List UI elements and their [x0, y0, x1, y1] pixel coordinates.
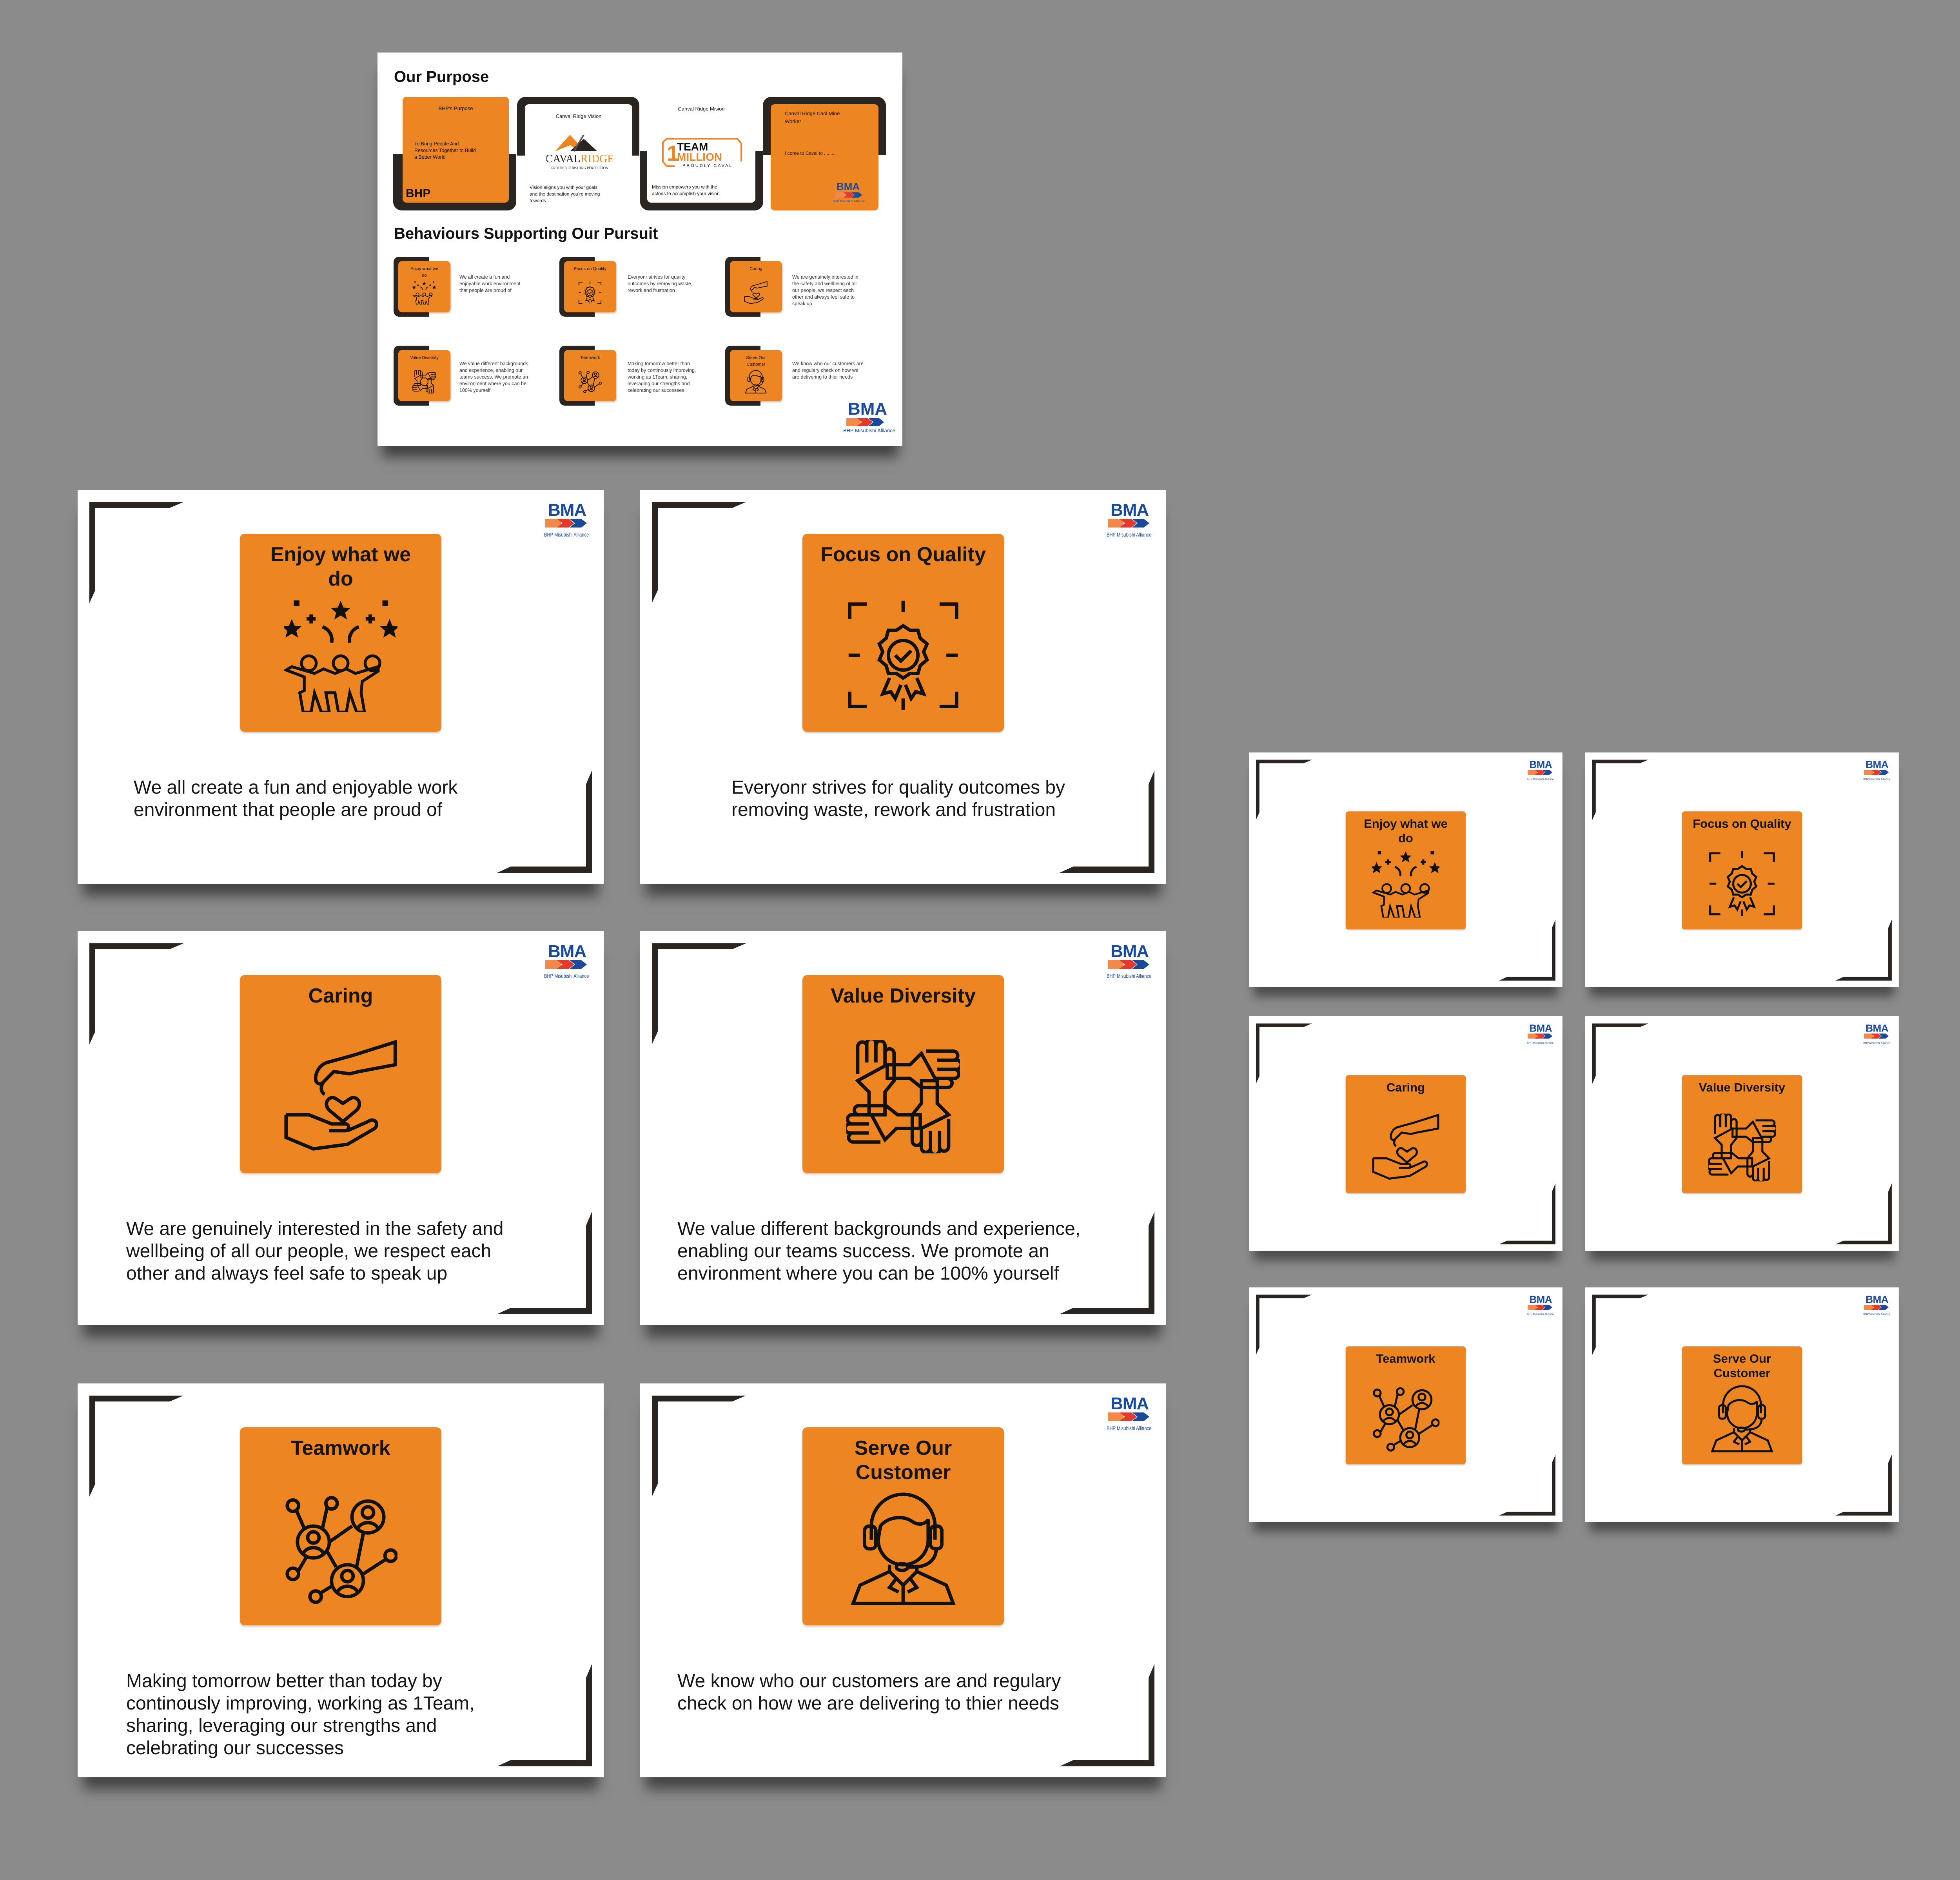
text: caring: other and always feel safe to [792, 294, 855, 300]
small card: Enjoy what we do [1249, 752, 1563, 987]
card: BHP's Purpose [403, 97, 509, 203]
item: Serve Our Customer [725, 346, 788, 406]
card: Teamwork: sharing, leveraging our strengths and [126, 1715, 437, 1736]
card: Value Diversity [640, 931, 1166, 1325]
item: Caring: Caring [750, 266, 762, 271]
text: caring: our people, we respect each [792, 288, 854, 293]
card: Canval Ridge Mission: Mission empowers you with the [652, 184, 717, 190]
small card: Caring: BHP Misubishi Alliance [1527, 1041, 1553, 1045]
small card: Enjoy what we do: BHP Misubishi Alliance [1527, 777, 1553, 781]
card: Enjoy what we do: We all create a fun and enjoyable work [134, 777, 457, 798]
text: quality: outcomes by removing waste, [628, 281, 692, 286]
card: BHP's Purpose: BHP’s Purpose [439, 105, 473, 111]
card: Serve Our Customer [640, 1383, 1166, 1777]
card: Serve Our Customer: BMA [1111, 1394, 1149, 1413]
small card: Serve Our Customer: Serve Our [1713, 1352, 1771, 1365]
small card: Enjoy what we do: Enjoy what we [1364, 817, 1448, 830]
item: Serve Our Customer: Serve Our [746, 355, 766, 360]
card: Caring: wellbeing of all our people, we respect each [126, 1241, 491, 1262]
card: Focus on Quality: removing waste, rework and frustration [731, 799, 1056, 820]
text: customer: are delivering to thier needs [792, 374, 853, 380]
card: Enjoy what we do: BHP Misubishi Alliance [544, 531, 589, 538]
logo: BMA: BMA [848, 399, 887, 419]
card: Caring: Caring [309, 984, 373, 1007]
card: Canval Ridge Vision: and the destination you’re moving [530, 191, 600, 197]
small card: Value Diversity: BHP Misubishi Alliance [1863, 1041, 1890, 1045]
card: Value Diversity: We value different backgrounds and experience, [677, 1218, 1080, 1239]
panel: overview sheet [377, 53, 902, 446]
card: Caring [78, 931, 604, 1325]
card: Serve Our Customer: BHP Misubishi Alliance [1107, 1425, 1151, 1431]
item: Value Diversity: Value Diversity [410, 355, 439, 360]
text: enjoy: that people are proud of [459, 288, 512, 293]
card: Enjoy what we do: Enjoy what we [270, 543, 411, 566]
card: Canval Ridge Coal Mine Worker [771, 104, 878, 210]
small card: Serve Our Customer: BHP Misubishi Alliance [1863, 1312, 1890, 1316]
card: Serve Our Customer: Customer [856, 1461, 951, 1484]
card: Focus on Quality: BHP Misubishi Alliance [1107, 531, 1151, 538]
card: Canval Ridge Coal Mine Worker: Canval Ridge Caol Mine [785, 111, 840, 116]
item: Teamwork: Teamwork [580, 355, 600, 360]
card: Canval Ridge Mission: TEAM [677, 141, 708, 153]
card: Teamwork: continously improving, working as 1Team, [126, 1693, 474, 1714]
card: Canval Ridge Coal Mine Worker: Worker [785, 118, 801, 124]
card: Focus on Quality: Focus on Quality [820, 543, 986, 566]
card: Enjoy what we do [78, 490, 604, 884]
card: Focus on Quality [640, 490, 1166, 884]
card: Canval Ridge Vision: CAVALRIDGE [546, 153, 613, 165]
card: Focus on Quality: Everyonr strives for quality outcomes by [731, 777, 1065, 798]
card: Value Diversity: enabling our teams success. We promote an [677, 1241, 1049, 1262]
text: diversity [459, 361, 528, 394]
card: Value Diversity: environment where you can be 100% yourself [677, 1263, 1059, 1284]
panel: purpose cards row [393, 96, 887, 211]
card: Canval Ridge Vision: PROUDLY PURSUING PERFECTION [551, 166, 608, 170]
text: caring: speak up [792, 301, 812, 306]
card: Enjoy what we do: do [328, 567, 353, 590]
card: Focus on Quality: BMA [1111, 500, 1149, 520]
small card: Value Diversity [1585, 1016, 1899, 1251]
small card: Caring: Caring [1387, 1081, 1425, 1094]
item: Enjoy what we do [394, 257, 456, 317]
text: teamwork: celebrating our successes [628, 388, 684, 393]
small card: Caring: BMA [1529, 1022, 1552, 1034]
item: Focus on Quality: Focus on Quality [574, 266, 606, 271]
card: Canval Ridge Mission [647, 97, 755, 203]
item: Focus on Quality [559, 257, 622, 317]
card: Teamwork: Making tomorrow better than today by [126, 1671, 442, 1691]
item: Value Diversity [394, 346, 456, 406]
small card: Value Diversity: BMA [1866, 1022, 1888, 1034]
text: enjoy: enjoyable work environment [459, 281, 521, 286]
text: teamwork: Making tomorrow better than [628, 361, 690, 366]
text: diversity: environment where you can be [459, 381, 526, 386]
card: Value Diversity: BHP Misubishi Alliance [1107, 973, 1151, 979]
card: Caring: BMA [548, 942, 586, 961]
card: Canval Ridge Vision: Vision aligns you with your goals [530, 185, 597, 190]
card: BHP's Purpose: BHP [406, 187, 430, 200]
small card: Caring [1249, 1016, 1563, 1251]
card: Serve Our Customer: We know who our customers are and regulary [677, 1671, 1061, 1691]
card: Canval Ridge Mission: 1 [667, 141, 679, 165]
small card: Teamwork [1249, 1287, 1563, 1522]
card: Enjoy what we do: BMA [548, 500, 586, 520]
card: Serve Our Customer: Serve Our [855, 1437, 952, 1459]
text: caring: We are genuinely interested in [792, 274, 858, 280]
card: Caring: We are genuinely interested in the safety and [126, 1218, 503, 1239]
text: diversity: We value different backgrounds [459, 361, 528, 366]
text: enjoy: We all create a fun and [459, 274, 510, 280]
text: customer: We know who our customers are [792, 361, 864, 366]
logo: BMA: BHP Misubishi Alliance [843, 428, 895, 433]
card: Caring: other and always feel safe to speak up [126, 1263, 447, 1284]
text: diversity: and experience, enabling our [459, 368, 523, 373]
card: Canval Ridge Coal Mine Worker: BMA [837, 181, 860, 192]
small card: Focus on Quality: BMA [1866, 759, 1888, 770]
item: Enjoy what we do: Enjoy what we [410, 266, 438, 271]
text: teamwork: leveraging our strengths and [628, 381, 690, 386]
small card: Serve Our Customer [1585, 1287, 1899, 1522]
item: Enjoy what we do: do [422, 273, 427, 278]
card: Canval Ridge Vision [525, 104, 632, 210]
small card: Serve Our Customer: Customer [1714, 1366, 1770, 1380]
card: Teamwork: Teamwork [291, 1437, 390, 1459]
card: Serve Our Customer: check on how we are delivering to thier needs [677, 1693, 1059, 1714]
small card: Serve Our Customer: BMA [1866, 1294, 1888, 1305]
text: enjoy [459, 274, 521, 294]
text: teamwork [628, 361, 696, 394]
card: Value Diversity: Value Diversity [831, 984, 976, 1007]
text: diversity: 100% yourself [459, 388, 490, 393]
card: BHP's Purpose: Resources Together to Build [414, 148, 476, 153]
card: Canval Ridge Vision: towords [530, 198, 546, 203]
card: Canval Ridge Mission: PROUDLY CAVAL [682, 163, 733, 168]
card: Canval Ridge Mission: MILLION [677, 151, 722, 163]
small card: Teamwork: BMA [1529, 1294, 1552, 1305]
text: teamwork: today by continously improving, [628, 368, 696, 373]
text: caring: the safety and wellbeing of all [792, 281, 857, 286]
small card: Focus on Quality: BHP Misubishi Alliance [1863, 777, 1890, 781]
small card: Focus on Quality: Focus on Quality [1693, 817, 1791, 830]
text: diversity: teams success. We promote an [459, 374, 528, 380]
card: Caring: BHP Misubishi Alliance [544, 973, 589, 979]
text: quality: rework and frustration [628, 288, 675, 293]
card: Canval Ridge Mission: Canval Ridge Mision [678, 106, 725, 112]
small card: Teamwork: BHP Misubishi Alliance [1527, 1312, 1553, 1316]
heading: Our Purpose: Our Purpose [394, 68, 489, 85]
small card: Enjoy what we do: do [1398, 831, 1413, 845]
text: quality: Everyonr strives for quality [628, 274, 685, 280]
text: customer [792, 361, 864, 381]
card: Teamwork: celebrating our successes [126, 1738, 344, 1759]
text: teamwork: working as 1Team, sharing, [628, 374, 687, 380]
card: Canval Ridge Coal Mine Worker: I come to Caval to ......... [785, 150, 836, 156]
card: BHP's Purpose: To Bring People And [414, 141, 459, 147]
card: Value Diversity: BMA [1111, 942, 1149, 961]
small card: Teamwork: Teamwork [1376, 1352, 1435, 1365]
small card: Enjoy what we do: BMA [1529, 759, 1552, 770]
heading: Behaviours Supporting Our Pursuit: Behaviours Supporting Our Pursuit [394, 225, 658, 242]
text: customer: and regulary check on how we [792, 368, 858, 373]
card: Canval Ridge Mission: actons to accomplish your vision [652, 191, 720, 196]
small card: Focus on Quality [1585, 752, 1899, 987]
text: caring [792, 274, 858, 307]
text: quality [628, 274, 692, 294]
card: Enjoy what we do: environment that people are proud of [134, 799, 442, 820]
card: Canval Ridge Vision: Canval Ridge Vision [556, 113, 601, 119]
item: Caring [725, 257, 788, 317]
small card: Value Diversity: Value Diversity [1699, 1081, 1785, 1094]
item: Serve Our Customer: Customer [747, 362, 765, 367]
card: Teamwork [78, 1383, 604, 1777]
logo: BMA [843, 399, 888, 435]
card: BHP's Purpose: a Better World [414, 154, 446, 160]
card: Canval Ridge Coal Mine Worker: BHP Misubishi Alliance [833, 199, 865, 203]
item: Teamwork [559, 346, 622, 406]
